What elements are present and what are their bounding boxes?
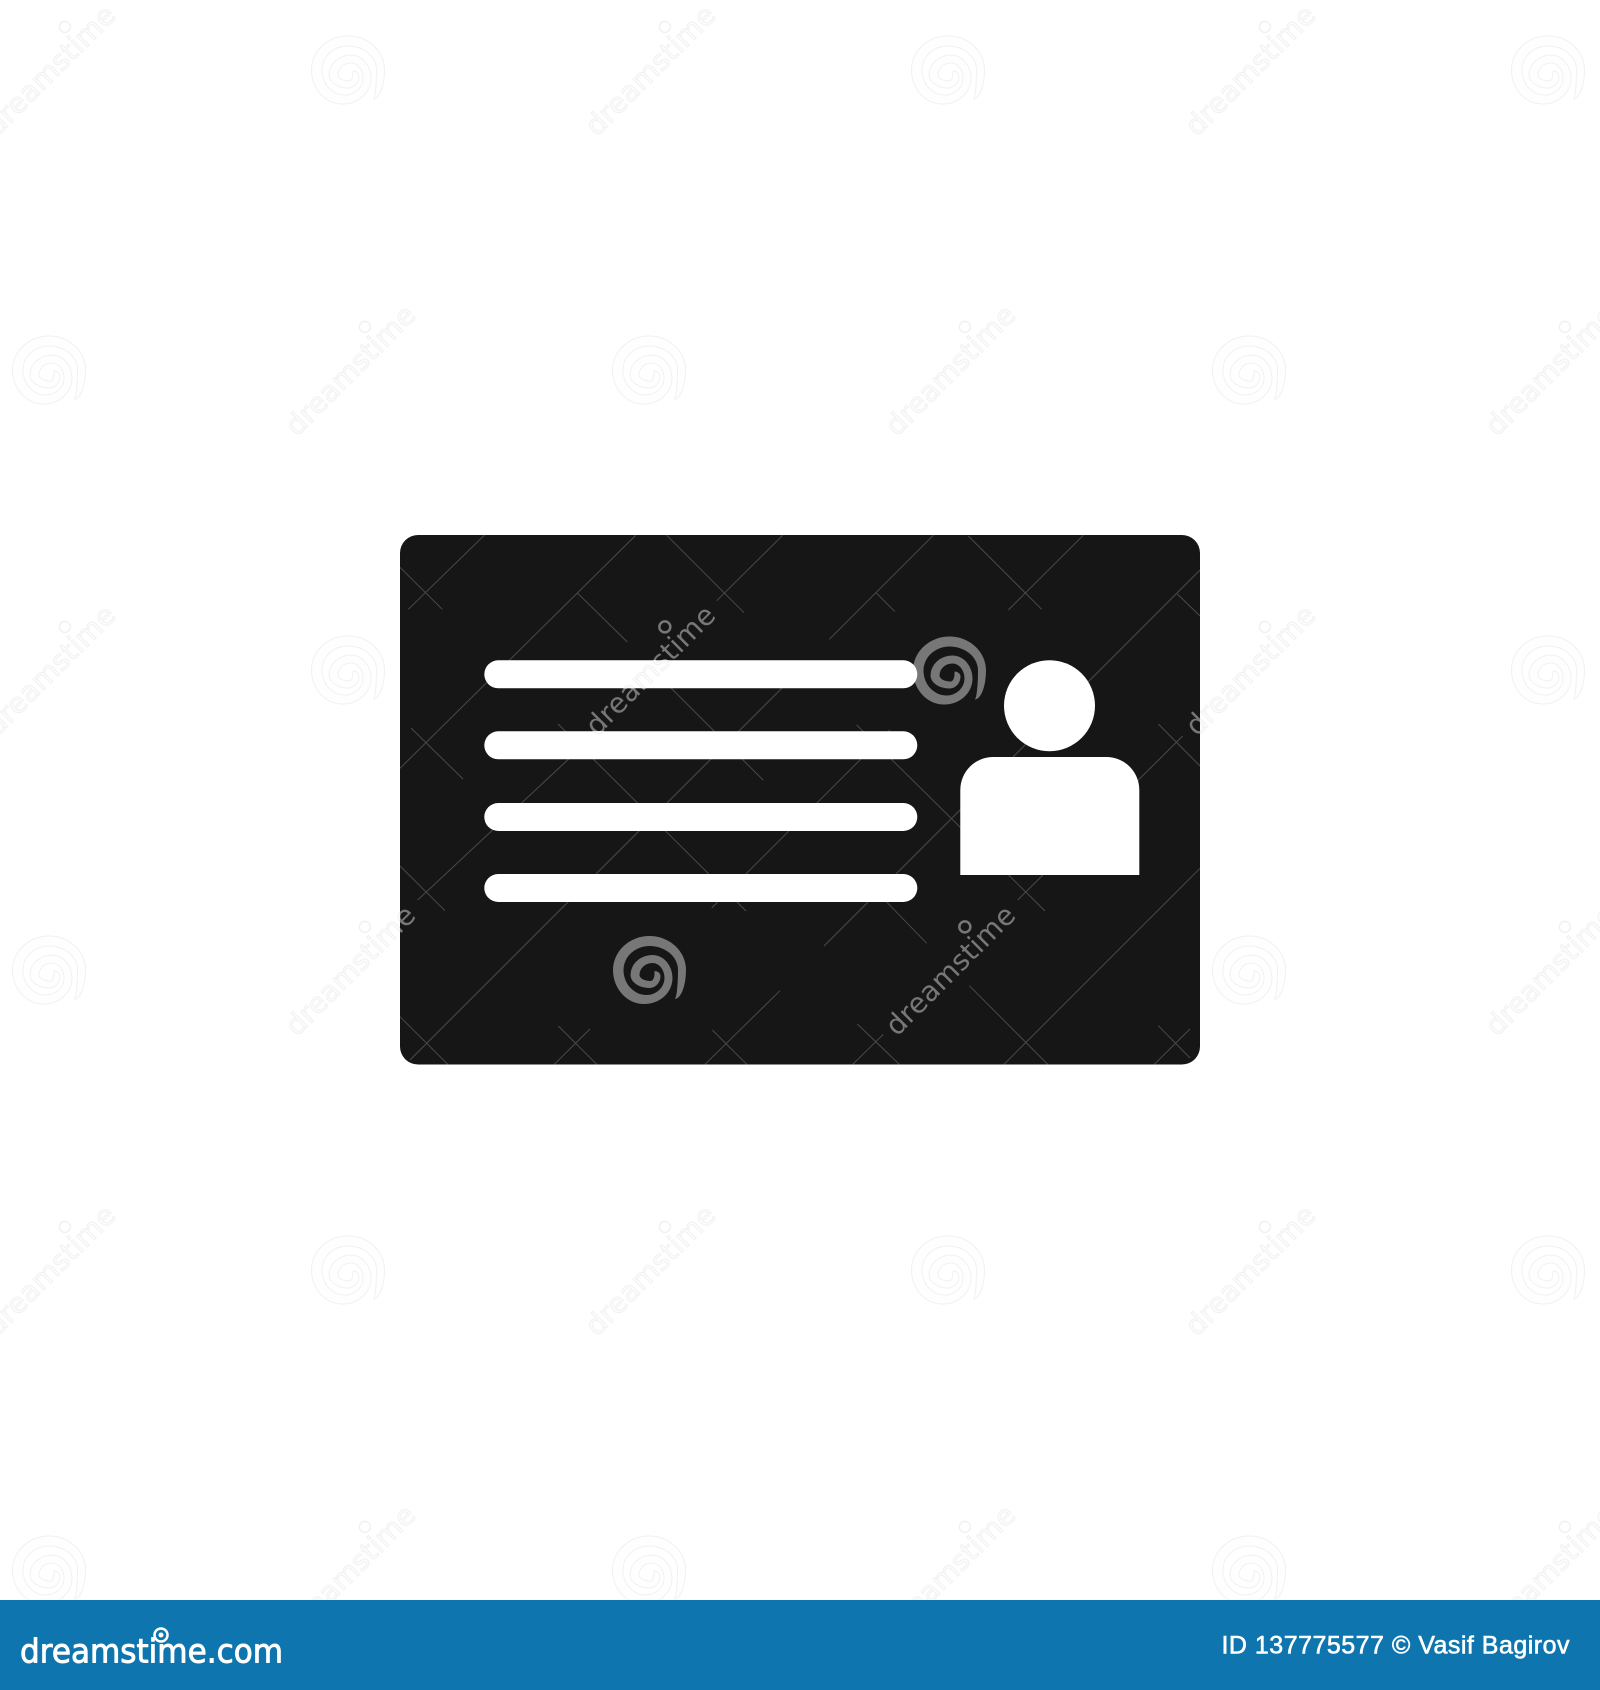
icon: person head <box>1004 660 1095 751</box>
watermark wordmarks on card <box>400 610 1200 1034</box>
watermark wordmarks on card: dreamstime <box>279 899 422 1042</box>
faint watermark pattern on white background: dreamstime <box>579 0 722 142</box>
footer logo: dreamstime.com: dreamstime.com <box>20 1632 283 1670</box>
watermark spiral on card, bottom left <box>613 936 686 1004</box>
icon: person body <box>960 757 1139 875</box>
faint watermark pattern on white background: dreamstime <box>279 299 422 442</box>
text line bars <box>484 660 917 902</box>
faint watermark pattern on white background: dreamstime <box>879 299 1022 442</box>
footer bar <box>0 1600 1600 1690</box>
card body <box>400 535 1200 1064</box>
watermark spiral on card, top right <box>913 636 986 705</box>
faint watermark pattern on white background: dreamstime <box>879 1499 1022 1642</box>
faint watermark pattern on white background: dreamstime <box>579 1199 722 1342</box>
footer credit: image ID and author: ID 137775577 © Vasif Bagirov <box>1222 1631 1570 1659</box>
faint watermark pattern on white background: dreamstime <box>279 1499 422 1642</box>
watermark wordmarks on card: dreamstime <box>1179 599 1322 742</box>
faint watermark pattern on white background: dreamstime <box>279 899 422 1042</box>
faint wordmark over bars: dreamstime <box>579 599 722 742</box>
icon: ID card <box>400 535 1200 1064</box>
faint watermark pattern on white background: dreamstime <box>1179 1199 1322 1342</box>
faint watermark pattern on white background: dreamstime <box>1179 599 1322 742</box>
faint watermark pattern on white background: dreamstime <box>1179 0 1322 142</box>
watermark wordmarks on card: dreamstime <box>579 599 722 742</box>
watermark wordmarks on card: dreamstime <box>879 899 1022 1042</box>
